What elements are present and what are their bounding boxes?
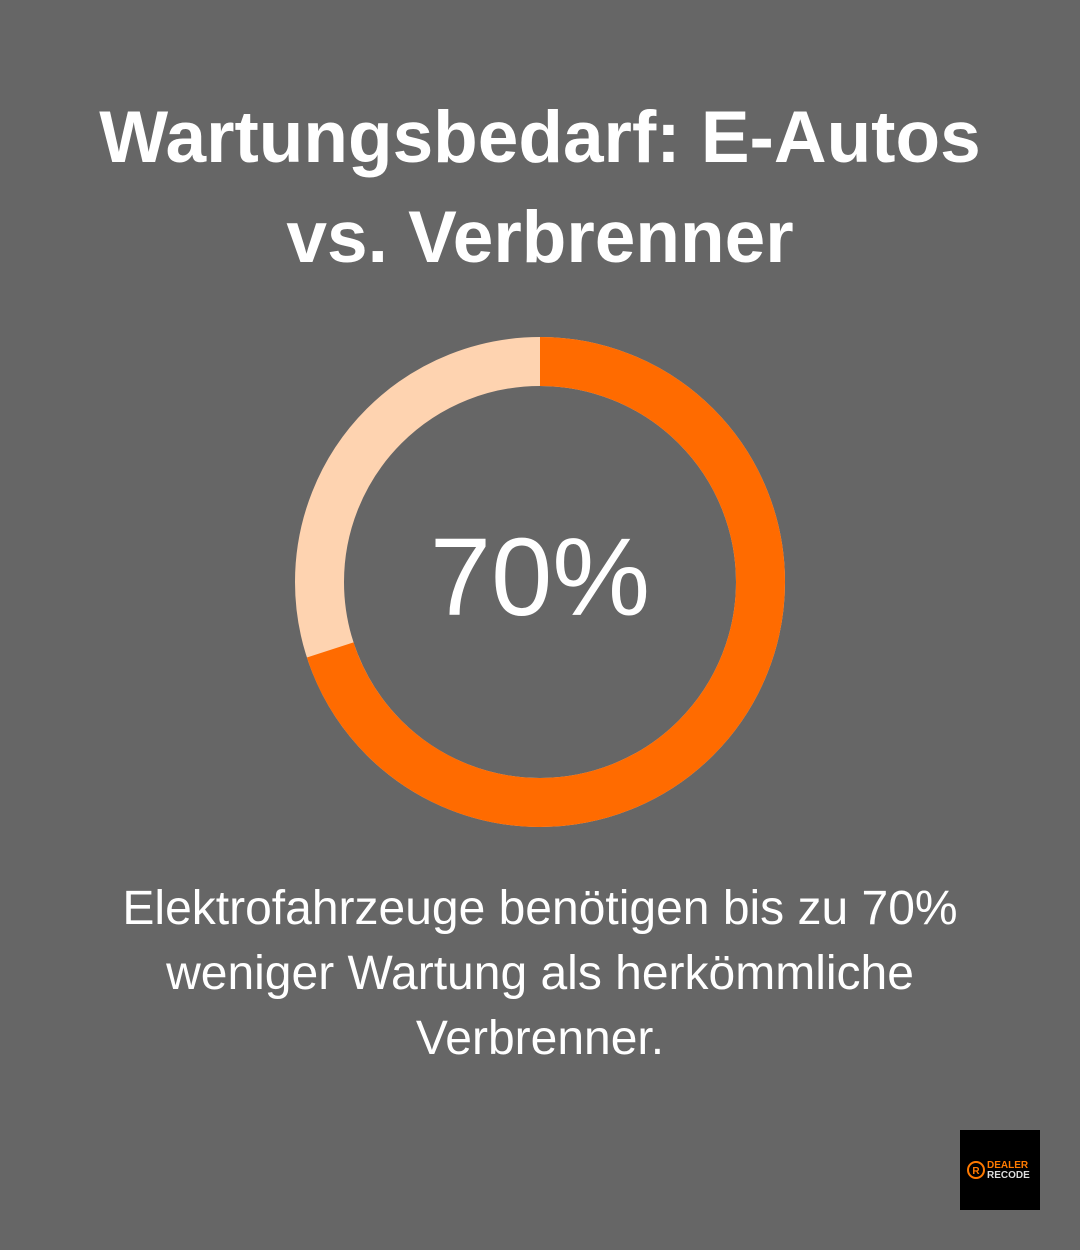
ring value 70% — [320, 362, 760, 802]
description text: weniger Wartung als herkömmliche — [166, 947, 914, 1000]
logo: DEALER — [987, 1160, 1029, 1171]
center value: 70% — [430, 516, 650, 639]
logo: R — [972, 1166, 980, 1177]
title: Wartungsbedarf: E-Autos — [99, 97, 981, 178]
description text — [122, 882, 958, 1065]
title: vs. Verbrenner — [286, 197, 794, 278]
ring background — [320, 362, 760, 802]
logo: RECODE — [987, 1170, 1030, 1181]
description text: Elektrofahrzeuge benötigen bis zu 70% — [122, 882, 958, 935]
logo — [960, 1130, 1040, 1210]
description text: Verbrenner. — [416, 1012, 664, 1065]
title — [99, 97, 981, 278]
